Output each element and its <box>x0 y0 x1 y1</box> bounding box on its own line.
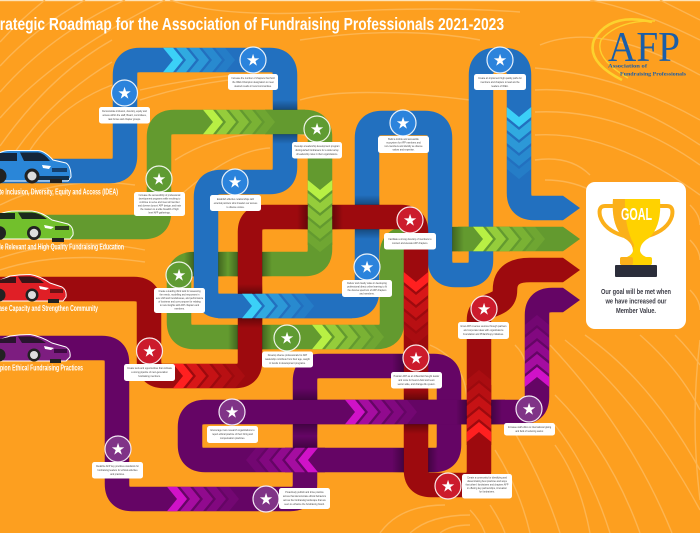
milestone: green 4: leadership contribute from their age, weight <box>265 358 310 361</box>
milestone: red 5: that others' fundraisers and chapters AFP <box>466 484 509 486</box>
milestone: blue 3: to diverse voices. <box>226 206 245 209</box>
logo: AFP: Association of <box>608 64 647 70</box>
milestone: red 5: for fundraisers. <box>479 490 495 494</box>
milestone: blue 4: ★ <box>360 258 374 276</box>
road base: red <box>0 217 563 485</box>
milestone: blue 4: and members. <box>360 292 375 296</box>
goal text <box>601 287 671 315</box>
milestone: green 3: members. <box>174 308 185 310</box>
icon: trophy: GOAL <box>621 204 652 224</box>
chevrons: red vertical <box>404 272 428 344</box>
milestone: green 2: the masters to a wide breadth of high <box>140 208 179 211</box>
milestone: red 2 <box>124 338 175 381</box>
road overlaps <box>218 122 510 460</box>
milestone: purple 1: ★ <box>111 440 125 458</box>
milestone: blue 2: Increase the number of chapters that hold <box>231 77 275 80</box>
milestone: green 2: continue to serve and meet all member <box>139 201 180 204</box>
milestone: red 3 <box>391 345 442 388</box>
milestone: purple 1 <box>92 436 143 478</box>
milestone: blue 4: the diverse spectrum of AFP chapters <box>348 289 387 292</box>
milestone: green 3: the needs, modelling and responses in <box>160 294 200 296</box>
milestone: blue 3 <box>210 169 261 211</box>
milestone: purple 1: Redefine AFP key practices standards for <box>96 465 139 468</box>
milestone: green 2 <box>134 166 185 216</box>
milestone: green 4: ★ <box>280 328 294 348</box>
milestone: blue 6: ★ <box>493 50 507 70</box>
milestone: red 4: Foundation and Philanthropy initiatives. <box>463 333 504 336</box>
milestone: red 5: ★ <box>441 476 455 496</box>
chevrons: blue right <box>507 107 531 179</box>
milestone: green 2: level AFP gatherings. <box>149 212 171 214</box>
goal text: Our goal will be met when <box>601 287 671 296</box>
milestone: purple 2: ★ <box>225 402 239 422</box>
milestone: purple 3: across that demonstrate ethical behaviors <box>283 495 327 498</box>
road base: green <box>0 122 563 337</box>
milestone: red 1: Facilitate a strong diversity of members to <box>388 238 432 241</box>
milestone: purple 2 <box>207 399 258 443</box>
car: green <box>0 211 73 242</box>
milestone: red 3: ★ <box>409 348 423 368</box>
milestone: blue 1: task forces and chapter groups. <box>108 118 141 121</box>
car: blue <box>0 150 71 184</box>
milestone: purple 3: ★ <box>259 490 273 508</box>
milestone: blue 2 <box>228 47 278 90</box>
milestone: purple 3: across the fundraising landscape that are <box>283 499 326 502</box>
milestone: green 1: ★ <box>310 120 324 138</box>
milestone: blue 5 <box>378 110 429 153</box>
milestone: red 2: a strong pipeline of next-generation <box>131 371 168 374</box>
milestone: blue 4 <box>342 254 392 297</box>
milestone: red 4: Grow AFP revenue sources through partners <box>460 325 507 328</box>
milestone: purple 1: fundraising leaders for ethical activities <box>98 469 138 472</box>
goal text: we have increased our <box>605 296 667 306</box>
milestone: blue 6: members and chapters to lead and be <box>480 81 520 84</box>
milestone: blue 1: Demonstrate inclusion, diversity, equity and <box>102 110 148 113</box>
milestone: blue 1: access within the staff, Board, committees, <box>102 114 147 117</box>
milestone: green 1 <box>292 116 342 158</box>
milestone: blue 5: ★ <box>396 114 410 132</box>
milestone: red 2: ★ <box>142 342 157 360</box>
milestone: green 3: to new insights with AFP chapters and <box>160 304 200 307</box>
milestone: red 4: ★ <box>477 300 491 318</box>
chevrons: red lower <box>173 364 245 388</box>
milestone: green 1: distinguished fundraisers for a wider array <box>295 149 339 152</box>
milestone: red 1: connect and elevate AFP chapters. <box>392 242 428 245</box>
milestone: red 1 <box>384 207 436 250</box>
milestone: red 2: Create tools and opportunities that cultivate <box>127 367 173 370</box>
milestone: green 1: Develop a leadership development program <box>294 145 340 148</box>
milestone: blue 6 <box>474 47 526 90</box>
arrow: blue <box>563 196 580 220</box>
car: purple <box>0 334 70 363</box>
milestone: purple 2: Encourage more research organizations to <box>210 429 255 432</box>
milestone: purple 2: compensation practices. <box>220 437 245 440</box>
milestone: purple 2: report ethical practice of their hiring and <box>212 433 254 436</box>
milestone: blue 5: ecosystem for AFP members and <box>386 142 421 144</box>
milestone: red 5: disseminating best practices and ways <box>467 480 508 483</box>
goal text: Member Value. <box>616 306 656 315</box>
chevrons: blue top <box>163 48 235 72</box>
milestone: green 4: Develop diverse professionals for AFP <box>268 354 308 357</box>
title: Strategic Roadmap for the Association of Fundraising Professionals 2021-2023 <box>0 14 504 34</box>
milestone: blue 6: leaders of IDEA. <box>492 85 509 88</box>
chevrons: red up <box>467 370 491 442</box>
milestone: green 2: and diverse donors' AFP design, and train <box>138 204 182 208</box>
milestone: blue 6: Create an implement high quality paths for <box>478 77 522 80</box>
milestone: green 4: in trends in development programs. <box>269 362 306 365</box>
milestone: green 3: ★ <box>172 266 186 284</box>
chevrons: purple left <box>246 448 318 472</box>
milestone: red 2: fundraising members. <box>138 375 161 378</box>
milestone: blue 2: the IDEA Champion designation to meet <box>232 81 274 84</box>
milestone: blue 1 <box>99 80 150 124</box>
milestone: blue 4: Deliver and clearly value in developing <box>347 282 388 285</box>
chevrons: green right <box>473 227 545 251</box>
milestone: blue 1: ★ <box>117 84 132 102</box>
milestone: blue 2: desired results in local communities. <box>234 85 272 88</box>
milestone: red 5 <box>435 473 512 499</box>
icon: trophy <box>600 199 672 277</box>
milestone: red 4: and corporate ideas with organizations <box>464 329 504 332</box>
milestone: red 4 <box>458 296 509 339</box>
milestone: green 3: Create a leading think tank for assessing <box>158 290 201 293</box>
milestone: green 2: development programs while evolving to <box>139 198 181 200</box>
chevrons: green vertical <box>308 180 332 252</box>
chevrons: blue middle <box>242 294 314 318</box>
milestone: purple 3: Proactively publish and drive practice <box>285 491 324 494</box>
chevrons: purple bottom <box>167 487 239 511</box>
milestone: purple 4: Increase staff ethics to international giving <box>508 426 552 429</box>
milestone: green 2: ★ <box>152 170 166 188</box>
chevrons: green lower <box>312 325 384 349</box>
panel: goal card <box>586 182 686 329</box>
milestone: purple 4 <box>504 396 555 436</box>
milestone: green 2: Increase the accessibility of professional <box>139 194 181 197</box>
crossing shadows <box>184 100 502 472</box>
milestone: purple 4: ★ <box>522 400 536 418</box>
milestone: purple 3 <box>253 486 330 512</box>
chevrons: green top <box>203 110 275 134</box>
milestone: blue 3: external partners who broaden our access <box>214 202 258 205</box>
milestone: red 1: ★ <box>403 210 417 230</box>
milestone: blue 3: Establish effective relationships with <box>217 198 255 201</box>
milestone: green 3: of business and core purpose for relating <box>158 300 201 304</box>
milestone: blue 5: non-members and identify as diverse <box>384 145 423 148</box>
logo: AFP <box>593 19 686 80</box>
milestone: red 3: Position AFP as an influential thought leader <box>394 375 440 378</box>
logo: AFP: AFP <box>608 25 680 71</box>
milestone: blue 2: ★ <box>246 50 260 70</box>
milestone: green 4 <box>262 325 313 368</box>
road base: purple <box>0 300 563 499</box>
milestone: red 3: sector-wide, and change-life system. <box>398 383 436 386</box>
milestone: blue 3: ★ <box>228 172 242 192</box>
milestone: purple 4: and field of reducing savior. <box>515 430 544 433</box>
milestone: green 3: ever-shift and trends/issues, and performance <box>156 297 204 300</box>
milestone: purple 3: seen to enhance the fundraising brand. <box>284 503 325 506</box>
arrow: green <box>563 227 580 251</box>
milestone: purple 1: and practices. <box>110 473 125 476</box>
milestone: red 5: in offering key partnerships, innovation <box>467 487 508 490</box>
chevrons: purple up <box>525 315 549 387</box>
milestone: red 5: Create a community for identifying and <box>467 476 508 480</box>
car: red <box>0 274 66 303</box>
milestone: green 1: of leadership roles in their organizations. <box>296 153 338 156</box>
milestone: red 3: and voice for best-in-field and team <box>398 379 435 382</box>
arrow: red <box>563 258 580 282</box>
arrow: purple <box>563 288 580 312</box>
milestone: green 3 <box>154 262 205 313</box>
milestone: blue 5: Build a nimble and accessible <box>388 139 420 141</box>
milestone: blue 5: values and expertise. <box>392 148 415 152</box>
chevrons: purple row <box>345 400 417 424</box>
milestone: blue 4: professional direct online learning to fit <box>347 286 387 288</box>
road base: blue <box>0 60 563 306</box>
logo: AFP: Fundraising Professionals <box>620 72 686 78</box>
